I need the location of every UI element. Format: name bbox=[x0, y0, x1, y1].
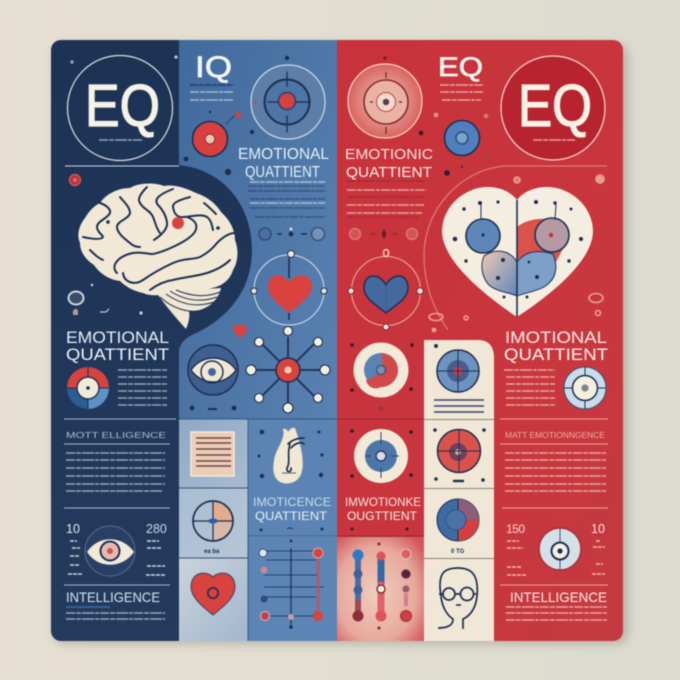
heart bubble outline, red side bbox=[424, 166, 607, 330]
cell: slider chart, blue column bbox=[249, 536, 337, 641]
text block, blue column bbox=[248, 182, 326, 217]
heading: Emotional Quotient, blue column bbox=[238, 146, 329, 181]
heading: Intelligence, navy side bbox=[64, 585, 170, 619]
text block beside donut bbox=[118, 370, 167, 405]
eye dial with numbers, navy side: 10 bbox=[66, 522, 80, 536]
IQ heading: IQ bbox=[195, 51, 232, 84]
dial, red side bbox=[564, 367, 606, 409]
section rule and subheading, navy side bbox=[64, 419, 176, 444]
cell: red dial with white ring bbox=[350, 342, 414, 412]
small connector icons, blue column bbox=[259, 228, 324, 240]
text block, red side bbox=[505, 453, 606, 491]
text block, red column bbox=[347, 181, 426, 217]
heading: Emotional Quotient, navy side: QUATTIENT bbox=[66, 345, 169, 364]
red ring icon, blue column bbox=[184, 111, 254, 175]
small icons, navy side bbox=[68, 55, 178, 315]
heading: Imotionike Quattient: IMWOTIONKE bbox=[345, 497, 421, 509]
heading: Emotionic Quattient, red column bbox=[345, 146, 433, 181]
cell: quadrant dial: ea ba bbox=[204, 549, 220, 555]
EQ badge, navy side bbox=[68, 56, 172, 160]
section rule and subheading, navy side: MOTT ELLIGENCE bbox=[66, 431, 166, 440]
cerebellum stripes bbox=[160, 290, 220, 311]
target dial, blue column bbox=[251, 56, 325, 139]
dial with numbers, red side: 150 bbox=[506, 522, 525, 536]
heading: Imotional Quattient, red side: IMOTIONAL bbox=[505, 328, 607, 347]
heart in ring, red column bbox=[348, 249, 423, 330]
dial with numbers, red side: 10 bbox=[591, 522, 605, 536]
EQ badge, red side bbox=[501, 56, 605, 160]
small icons around the heart bbox=[429, 175, 604, 332]
dial, red column bbox=[348, 56, 422, 138]
heading: Imotigence Quattient bbox=[253, 497, 331, 532]
EQ badge, navy side: EQ bbox=[85, 73, 160, 139]
heading: Imotionike Quattient: OUGTTIENT bbox=[347, 511, 417, 523]
heart in ring, blue column bbox=[251, 250, 327, 325]
panel: red half background bbox=[337, 40, 623, 641]
heart illustration, red side bbox=[442, 187, 593, 317]
section rule and subheading, red side bbox=[500, 419, 608, 444]
cell: blue red dial bbox=[434, 344, 484, 412]
IQ heading bbox=[190, 51, 233, 100]
cell: quadrant dial bbox=[179, 488, 248, 558]
text block beside dial, red side bbox=[504, 370, 555, 405]
heading: Emotionic Quattient, red column: EMOTIONIC bbox=[345, 146, 433, 163]
cell: anatomical heart bbox=[248, 419, 337, 535]
blue ring icon, red column bbox=[419, 113, 489, 176]
heading: Imotigence Quattient: IMOTICENCE bbox=[253, 497, 331, 509]
EQ badge, red side: EQ bbox=[518, 73, 592, 139]
heading: Emotional Quotient, navy side: EMOTIONAL bbox=[66, 328, 169, 347]
small heart marker bbox=[233, 325, 247, 338]
red marker bbox=[172, 217, 184, 229]
heading: Imotional Quattient, red side: QUATTIENT bbox=[504, 345, 608, 364]
heading: Emotionic Quattient, red column: QUATTIENT bbox=[346, 164, 432, 181]
cell: heart bbox=[179, 558, 248, 641]
heading: Emotional Quotient, blue column: QUATTIENT bbox=[245, 164, 320, 181]
dial with numbers, red side bbox=[502, 508, 608, 575]
heading: Emotional Quotient, blue column: EMOTIONAL bbox=[238, 146, 329, 163]
cell: eye icon bbox=[188, 345, 238, 410]
heading: Emotional Quotient, navy side bbox=[66, 328, 169, 364]
heading: Intelligence, navy side: INTELLIGENCE bbox=[66, 589, 160, 605]
heading: Imotigence Quattient: QUATTIENT bbox=[255, 511, 327, 523]
card shadow bbox=[54, 44, 628, 644]
heading: Intelligence, red side: INTELLIGENCE bbox=[510, 589, 607, 605]
brain folds bbox=[83, 187, 235, 290]
cell: blue red split dial: 0 TG bbox=[451, 549, 465, 555]
red column divider lines bbox=[337, 419, 423, 536]
divider below EQ badge bbox=[65, 165, 179, 167]
brain stem and cerebellum bbox=[156, 288, 221, 329]
section rule and subheading, red side: MATT EMOTIONNGENCE bbox=[505, 431, 605, 440]
divider lines in the grid bbox=[179, 419, 337, 641]
donut chart, navy side bbox=[67, 367, 109, 409]
cell: sliders on pink bbox=[337, 537, 424, 641]
brain illustration bbox=[78, 184, 237, 329]
cell: ruled paper bbox=[179, 419, 248, 488]
eye dial with numbers, navy side bbox=[64, 508, 170, 576]
small connector icons, red column bbox=[350, 228, 418, 240]
cell: blue red split dial bbox=[437, 499, 479, 555]
cell: blue dial with white ring bbox=[350, 429, 413, 483]
cerebrum bbox=[78, 184, 237, 295]
text block, navy side bbox=[66, 453, 165, 491]
heading: Intelligence, red side bbox=[500, 585, 608, 620]
heading: Imotionike Quattient bbox=[345, 497, 421, 530]
panel: blue column background bbox=[175, 40, 339, 641]
panel: navy column with brain bubble bbox=[51, 40, 252, 641]
heading: EQ, red column: EQ bbox=[438, 52, 483, 82]
cell: face with glasses bbox=[438, 568, 477, 629]
cell: red dial bbox=[433, 428, 486, 482]
panel: cream column bbox=[424, 340, 494, 641]
cream column dividers bbox=[424, 420, 494, 558]
heading: Imotional Quattient, red side bbox=[504, 328, 608, 364]
node diagram bbox=[246, 326, 330, 413]
heading: EQ, red column bbox=[438, 52, 483, 100]
eye dial with numbers, navy side: 280 bbox=[146, 522, 167, 536]
